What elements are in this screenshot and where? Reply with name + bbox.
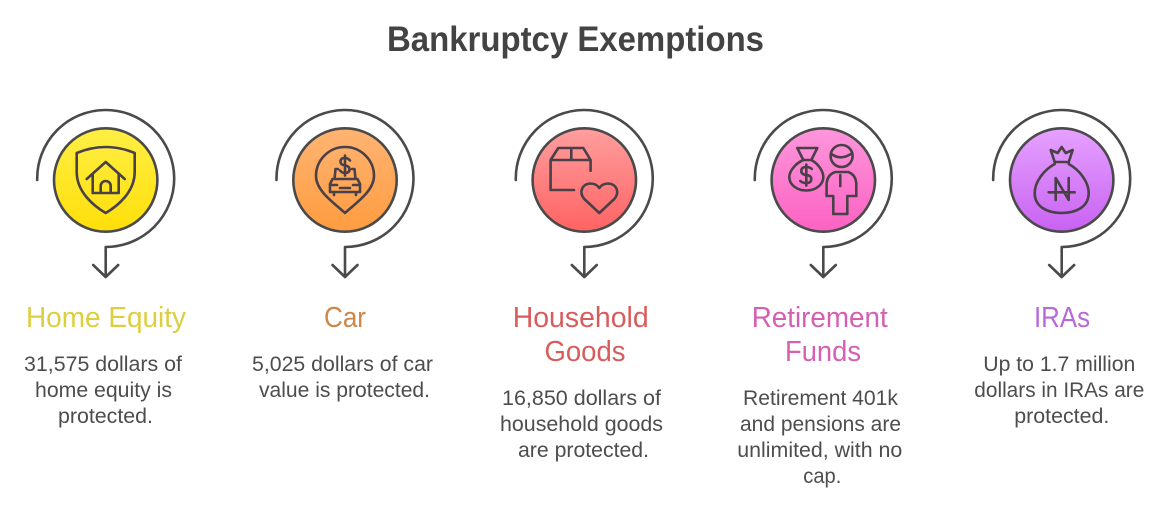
- text block: retirement funds description: unlimited, with no: [737, 438, 902, 462]
- heading: household goods: [513, 302, 649, 368]
- panel: home equity: [24, 110, 187, 428]
- text block: car description: [252, 352, 433, 402]
- graphic: home equity circle, arc and arrow: [37, 110, 174, 277]
- panel: car: [252, 110, 433, 402]
- icon: shield with house: [77, 147, 135, 213]
- graphic: household goods circle, arc and arrow: [516, 110, 653, 277]
- text block: retirement funds description: cap.: [803, 464, 841, 488]
- icon: money bag and person: [789, 145, 856, 214]
- title: Bankruptcy Exemptions: [387, 20, 764, 59]
- circle: red badge: [533, 128, 636, 232]
- graphic: iras circle, arc and arrow: [993, 110, 1130, 277]
- text block: retirement funds description: [737, 386, 902, 488]
- heading: retirement funds: Retirement: [752, 302, 888, 334]
- icon: location pin with car and dollar: [316, 147, 374, 213]
- arrow: curved ring leading down: [516, 110, 653, 277]
- text block: household goods description: household goods: [500, 412, 663, 436]
- icon: money bag with naira sign: [1035, 147, 1089, 213]
- circle: orange badge: [293, 128, 397, 232]
- arrow: curved ring leading down: [37, 110, 174, 277]
- text block: home equity description: home equity is: [35, 378, 172, 402]
- text block: car description: value is protected.: [259, 378, 430, 402]
- graphic: retirement funds circle, arc and arrow: [755, 110, 892, 277]
- text block: household goods description: are protected.: [518, 438, 649, 462]
- heading: car: Car: [324, 302, 366, 334]
- circle: yellow badge: [54, 128, 157, 232]
- text block: retirement funds description: Retirement 401k: [743, 386, 898, 410]
- text block: home equity description: protected.: [58, 404, 153, 428]
- text block: home equity description: 31,575 dollars of: [24, 352, 182, 376]
- text block: iras description: Up to 1.7 million: [983, 352, 1135, 376]
- text block: iras description: [974, 352, 1144, 428]
- arrow: curved ring leading down: [276, 110, 413, 277]
- panel: household goods: [500, 110, 663, 462]
- text block: iras description: protected.: [1014, 404, 1109, 428]
- circle: pink badge: [772, 128, 875, 232]
- text block: household goods description: [500, 386, 663, 462]
- icon: box and heart: [551, 148, 617, 213]
- text block: home equity description: [24, 352, 182, 428]
- heading: household goods: Household: [513, 302, 649, 334]
- arrow: curved ring leading down: [993, 110, 1130, 277]
- heading: retirement funds: Funds: [785, 336, 861, 368]
- arrow: curved ring leading down: [755, 110, 892, 277]
- heading: home equity: Home Equity: [26, 302, 187, 334]
- text block: iras description: dollars in IRAs are: [974, 378, 1144, 402]
- text block: car description: 5,025 dollars of car: [252, 352, 433, 376]
- heading: household goods: Goods: [544, 336, 626, 368]
- text block: retirement funds description: and pensions are: [740, 412, 901, 436]
- panel: iras: [974, 110, 1144, 428]
- text block: household goods description: 16,850 dollars of: [502, 386, 661, 410]
- circle: purple badge: [1010, 128, 1113, 232]
- heading: retirement funds: [752, 302, 888, 368]
- panel: retirement funds: [737, 110, 902, 488]
- heading: iras: IRAs: [1034, 302, 1090, 334]
- graphic: car circle, arc and arrow: [276, 110, 413, 277]
